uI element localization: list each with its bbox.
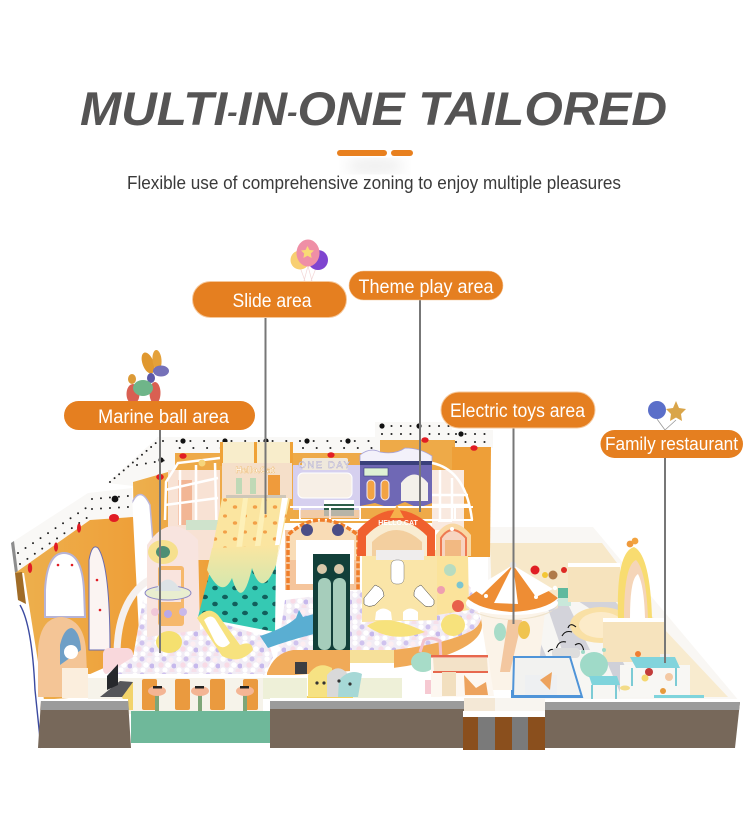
label: slide area — [192, 282, 346, 318]
title: - — [227, 96, 238, 129]
label: family restaurant: Family restaurant — [605, 433, 738, 454]
bar counter and stools — [88, 674, 263, 719]
jukebox arch — [38, 617, 88, 698]
pink arch and ufo — [145, 526, 200, 653]
restaurant tables — [589, 651, 704, 699]
title: IN — [238, 82, 288, 135]
yellow duck chair — [197, 611, 253, 659]
icon: star and blue balloons — [648, 401, 686, 430]
back wall: dotted band — [157, 422, 493, 557]
icon: balloon dog — [126, 350, 169, 404]
title: - — [287, 96, 298, 129]
label: marine ball area — [64, 401, 255, 430]
title: MULTI — [80, 82, 220, 135]
label: slide area: Slide area — [232, 291, 312, 312]
carousel — [466, 562, 558, 690]
right room: walls and striped floor — [488, 527, 740, 702]
leader line: family restaurant — [664, 458, 666, 663]
leader line: marine ball area — [159, 430, 161, 653]
entrance steps — [463, 698, 545, 750]
leader line: theme play area — [419, 300, 421, 512]
left wall: dotted band, orange face, side strip — [11, 488, 140, 748]
label: electric toys area — [441, 392, 595, 428]
green entrance floor — [131, 711, 270, 746]
cashier monitor — [100, 664, 133, 710]
leader line: electric toys area — [512, 428, 514, 624]
marine ball area: pit of balls — [100, 600, 273, 678]
front counter with shelves and elephant molds — [260, 662, 417, 699]
subtitle: Flexible use of comprehensive zoning to enjoy multiple pleasures — [127, 172, 621, 193]
icon: balloon bunch — [290, 240, 328, 281]
slide structure — [198, 442, 293, 632]
rainbow arch and platform — [570, 538, 665, 662]
slide structure: Hello.Cat — [235, 465, 275, 475]
blue frame booth — [511, 657, 582, 710]
playground floor plan illustration — [11, 422, 740, 750]
left white cage — [165, 458, 220, 590]
purple sign building — [293, 448, 432, 516]
red frame booth — [431, 655, 494, 697]
label: marine ball area: Marine ball area — [98, 407, 229, 428]
accent bars under title — [337, 150, 413, 173]
front wall segments — [38, 698, 740, 748]
teal rocking horse — [411, 638, 441, 694]
white tube and pink cylinder — [103, 574, 168, 675]
central ball pit with cat panel: HELLO.CAT — [378, 520, 418, 527]
purple sign building: ONE DAY — [298, 460, 352, 471]
dark green tower — [313, 550, 350, 650]
left back diagonal wall — [107, 438, 215, 665]
cage right with fence — [290, 463, 473, 530]
title: ONE TAILORED — [298, 82, 667, 135]
swing frame and teal ball — [548, 625, 608, 678]
candy balls cluster — [530, 566, 571, 606]
orange barrier around pit — [267, 616, 482, 677]
central ball pit with cat panel — [275, 505, 482, 672]
label: theme play area: Theme play area — [358, 276, 494, 298]
partition walls — [568, 563, 665, 662]
leader line: slide area — [264, 318, 266, 514]
blue whale — [260, 610, 314, 648]
wall arches — [45, 547, 110, 650]
label: electric toys area: Electric toys area — [450, 401, 585, 422]
